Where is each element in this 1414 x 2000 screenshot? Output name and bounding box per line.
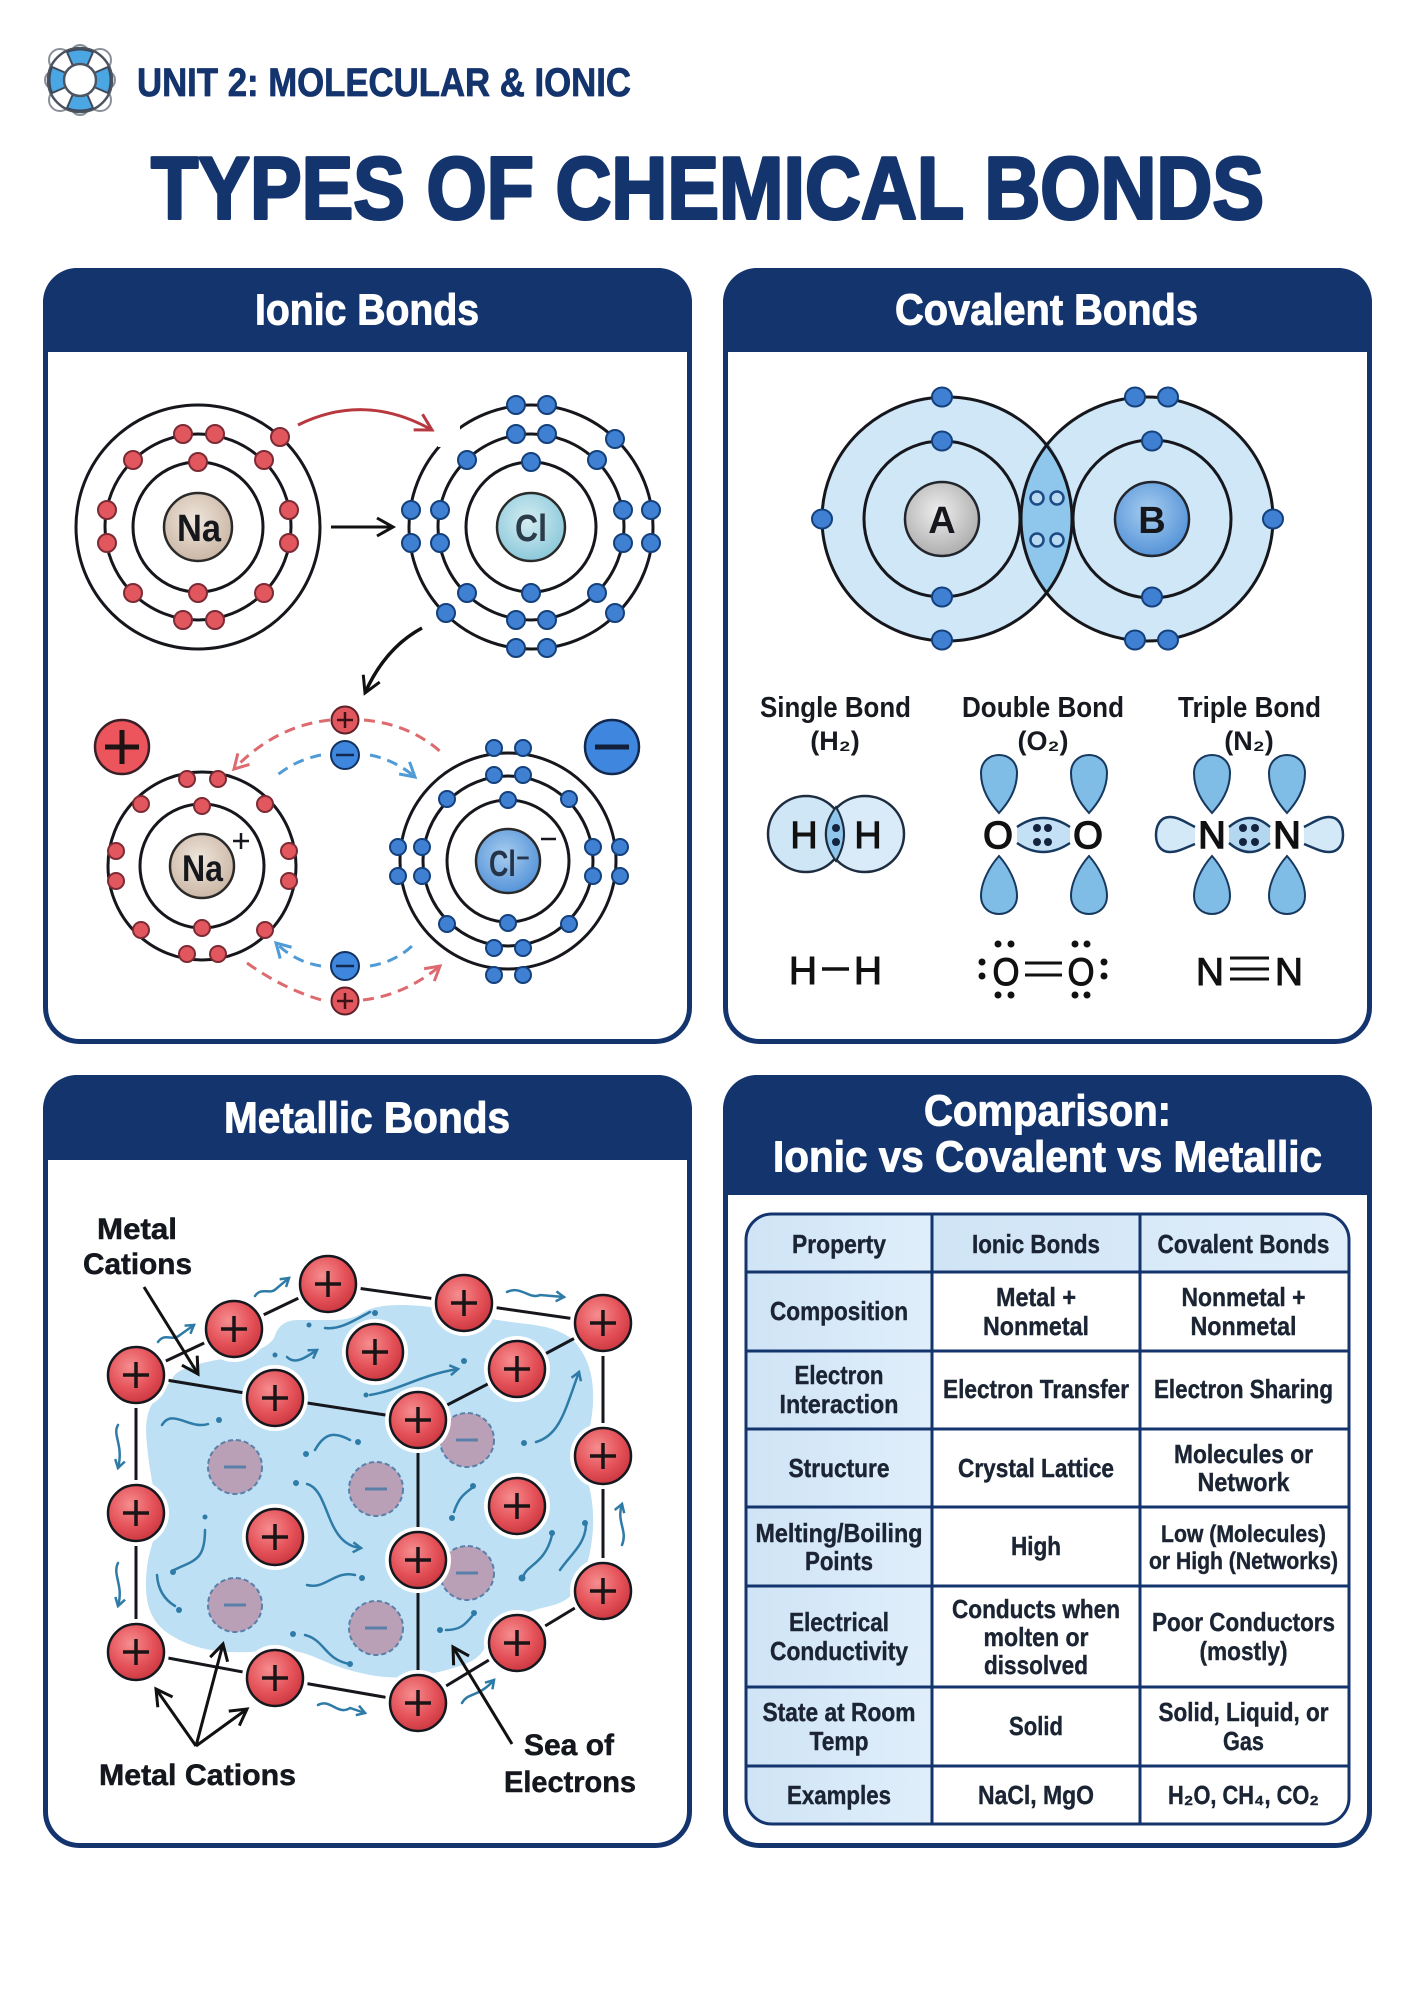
column: triple bond: N <box>1273 815 1301 857</box>
row: structure: Network <box>1198 1467 1290 1497</box>
atom: sodium <box>76 405 320 649</box>
row: state at room temp: State at Room <box>762 1697 916 1727</box>
diagram: shared electron atoms: A <box>928 500 956 542</box>
arrow: forms ions <box>365 628 422 693</box>
row: electrical conductivity: Electrical <box>789 1607 889 1637</box>
label: sea of electrons: Sea of <box>524 1729 615 1762</box>
attraction arrows: upper <box>234 706 442 777</box>
row: electrical conductivity: Conducts when <box>952 1594 1120 1624</box>
column: double bond <box>962 692 1124 998</box>
row: electrical conductivity: molten or <box>984 1622 1088 1652</box>
column: triple bond: N <box>1198 815 1226 857</box>
row: electron interaction <box>780 1360 1333 1419</box>
row: state at room temp: Temp <box>810 1726 868 1756</box>
covalent header bar <box>723 268 1372 352</box>
row: examples <box>787 1780 1319 1810</box>
row: composition: Nonmetal <box>1190 1311 1296 1341</box>
metal cations lattice <box>103 1251 636 1736</box>
panel: covalent bonds <box>723 268 1372 1042</box>
column: single bond: H <box>854 815 882 857</box>
row: electrical conductivity: Conductivity <box>770 1636 908 1666</box>
row: electrical conductivity <box>770 1594 1335 1680</box>
column: single bond: H <box>789 950 817 993</box>
table header row <box>792 1229 1330 1259</box>
atom: chlorine: Cl <box>515 508 547 550</box>
panel: metallic bonds <box>43 1075 692 1846</box>
attraction arrows: lower <box>247 943 440 1014</box>
column: double bond: (O₂) <box>1018 726 1068 756</box>
diagram: shared electron atoms: B <box>1138 500 1166 542</box>
electron motion squiggles <box>116 1278 624 1713</box>
table header row: Covalent Bonds <box>1158 1229 1330 1259</box>
label: metal cations bottom: Metal Cations <box>99 1759 296 1792</box>
column: double bond: O <box>983 815 1013 857</box>
row: composition: Composition <box>770 1296 908 1326</box>
row: state at room temp: Gas <box>1223 1726 1264 1756</box>
covalent heading: Covalent Bonds <box>895 286 1198 334</box>
row: state at room temp: Solid, Liquid, or <box>1158 1697 1328 1727</box>
column: double bond: O <box>992 951 1020 994</box>
panel: ionic bonds <box>43 268 692 1042</box>
arrow: electron transfer <box>298 410 432 430</box>
row: examples: H₂O, CH₄, CO₂ <box>1168 1780 1319 1810</box>
icon: large negative charge <box>585 720 639 774</box>
row: state at room temp <box>762 1697 1328 1756</box>
label: metal cations top: Cations <box>83 1248 192 1281</box>
row: structure: Crystal Lattice <box>958 1453 1114 1483</box>
row: melting and boiling points: High <box>1011 1531 1061 1561</box>
row: melting and boiling points <box>756 1518 1338 1576</box>
column: single bond: H <box>790 815 818 857</box>
title: TYPES OF CHEMICAL BONDS <box>151 138 1264 238</box>
column: triple bond: N <box>1275 951 1303 994</box>
row: examples: NaCl, MgO <box>978 1780 1094 1810</box>
column: triple bond: N <box>1196 951 1224 994</box>
comparison header bar <box>723 1075 1372 1195</box>
row: melting and boiling points: Melting/Boiling <box>756 1518 922 1548</box>
column: single bond: (H₂) <box>810 726 860 756</box>
ionic heading: Ionic Bonds <box>255 286 479 334</box>
row: melting and boiling points: Low (Molecules) <box>1161 1521 1326 1548</box>
row: electron interaction: Electron Transfer <box>943 1374 1129 1404</box>
atom: sodium: Na <box>177 508 222 550</box>
comparison heading: Comparison: <box>924 1086 1171 1136</box>
row: composition <box>770 1282 1306 1341</box>
label: sea of electrons: Electrons <box>504 1766 636 1799</box>
comparison table <box>746 1214 1349 1824</box>
column: triple bond: Triple Bond <box>1178 692 1321 724</box>
lattice bonds <box>136 1284 603 1703</box>
row: state at room temp: Solid <box>1009 1711 1063 1741</box>
atom: sodium ion <box>108 771 297 962</box>
row: melting and boiling points: Points <box>805 1546 873 1576</box>
column: triple bond: (N₂) <box>1224 726 1274 756</box>
label: metal cations top: Metal <box>97 1213 177 1246</box>
row: composition: Nonmetal + <box>1182 1282 1306 1312</box>
column: single bond: Single Bond <box>760 692 911 724</box>
label: sea of electrons <box>453 1647 636 1799</box>
row: composition: Metal + <box>996 1282 1076 1312</box>
label: metal cations top <box>83 1213 198 1374</box>
atom: chlorine <box>402 396 660 657</box>
row: structure <box>788 1439 1313 1497</box>
atom: chloride ion: Cl⁻ <box>489 843 530 884</box>
arrow: to chlorine <box>331 526 393 528</box>
diagram: shared electron atoms <box>812 388 1283 650</box>
row: examples: Examples <box>787 1780 891 1810</box>
icon: atom life-ring logo <box>45 45 115 115</box>
comparison heading: Ionic vs Covalent vs Metallic <box>773 1132 1322 1182</box>
delocalised electron anions <box>208 1413 494 1655</box>
column: triple bond <box>1156 692 1343 994</box>
panel: comparison <box>723 1075 1372 1846</box>
row: composition: Nonmetal <box>983 1311 1089 1341</box>
atom: sodium ion: Na <box>182 848 223 889</box>
atom: chloride ion <box>390 740 628 983</box>
ionic header bar <box>43 268 692 352</box>
row: structure: Structure <box>788 1453 890 1483</box>
row: electron interaction: Electron <box>794 1360 884 1390</box>
row: electrical conductivity: (mostly) <box>1200 1636 1288 1666</box>
row: electrical conductivity: Poor Conductors <box>1152 1607 1335 1637</box>
column: double bond: O <box>1068 951 1094 994</box>
sea of electrons <box>146 1305 593 1678</box>
table header row: Property <box>792 1229 886 1259</box>
table header row: Ionic Bonds <box>972 1229 1100 1259</box>
label: metal cations bottom <box>99 1644 296 1792</box>
row: electron interaction: Interaction <box>780 1389 898 1419</box>
row: electrical conductivity: dissolved <box>984 1650 1088 1680</box>
column: double bond: O <box>1073 815 1103 857</box>
unit heading: UNIT 2: MOLECULAR & IONIC <box>137 61 631 105</box>
row: electron interaction: Electron Sharing <box>1154 1374 1333 1404</box>
column: double bond: Double Bond <box>962 692 1124 724</box>
column: single bond: H <box>854 950 882 993</box>
metallic header bar <box>43 1075 692 1160</box>
electron dots <box>170 1310 588 1667</box>
metallic heading: Metallic Bonds <box>224 1094 510 1142</box>
column: single bond <box>760 692 911 993</box>
icon: large positive charge <box>95 720 149 774</box>
row: structure: Molecules or <box>1174 1439 1313 1469</box>
comparison heading <box>773 1086 1322 1182</box>
row: melting and boiling points: or High (Networks) <box>1149 1548 1338 1575</box>
